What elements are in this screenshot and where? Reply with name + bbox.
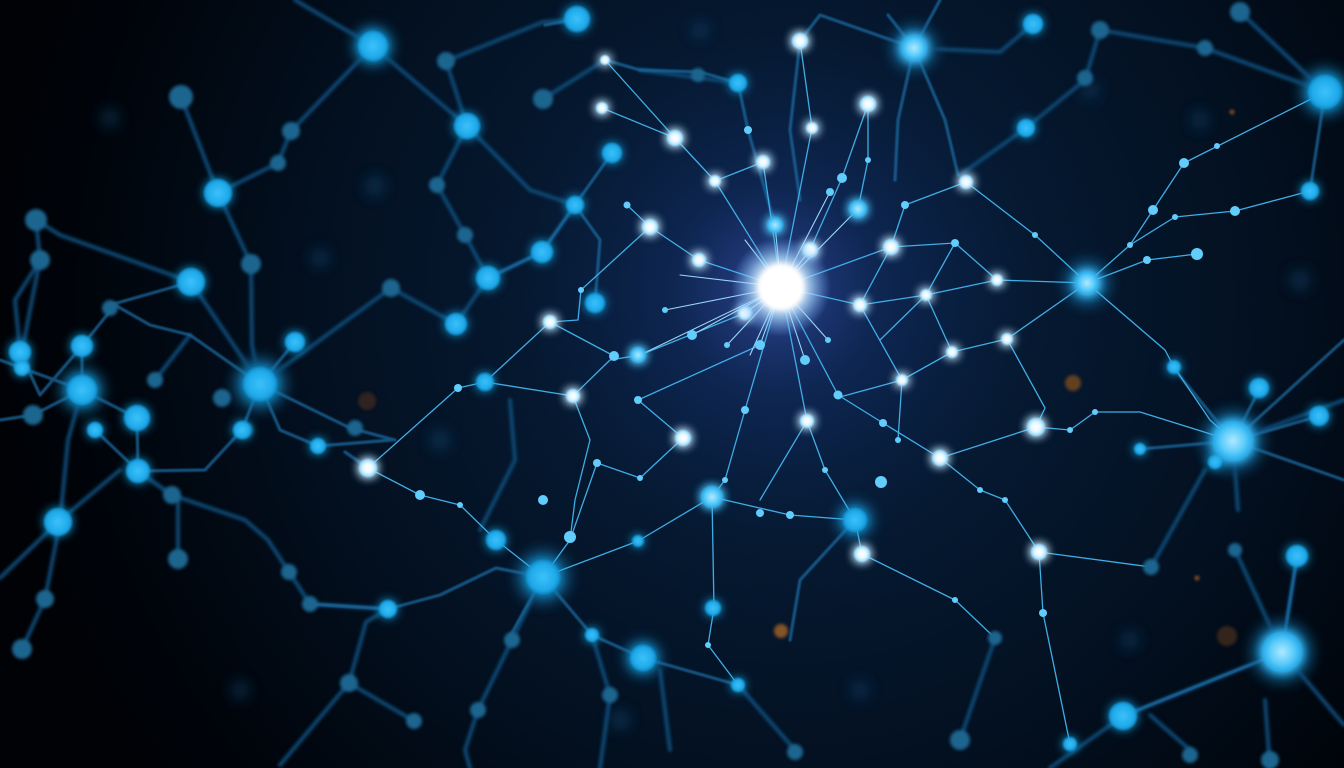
radiating core spokes [640, 192, 858, 360]
white glowing nodes [359, 33, 1047, 562]
central bright core [731, 237, 831, 337]
central blue halo [515, 30, 1035, 550]
small junction dots [415, 126, 1240, 648]
large pale hub nodes [630, 35, 1302, 672]
warm background specks [358, 110, 1237, 646]
thin bright network edges [368, 41, 1325, 744]
